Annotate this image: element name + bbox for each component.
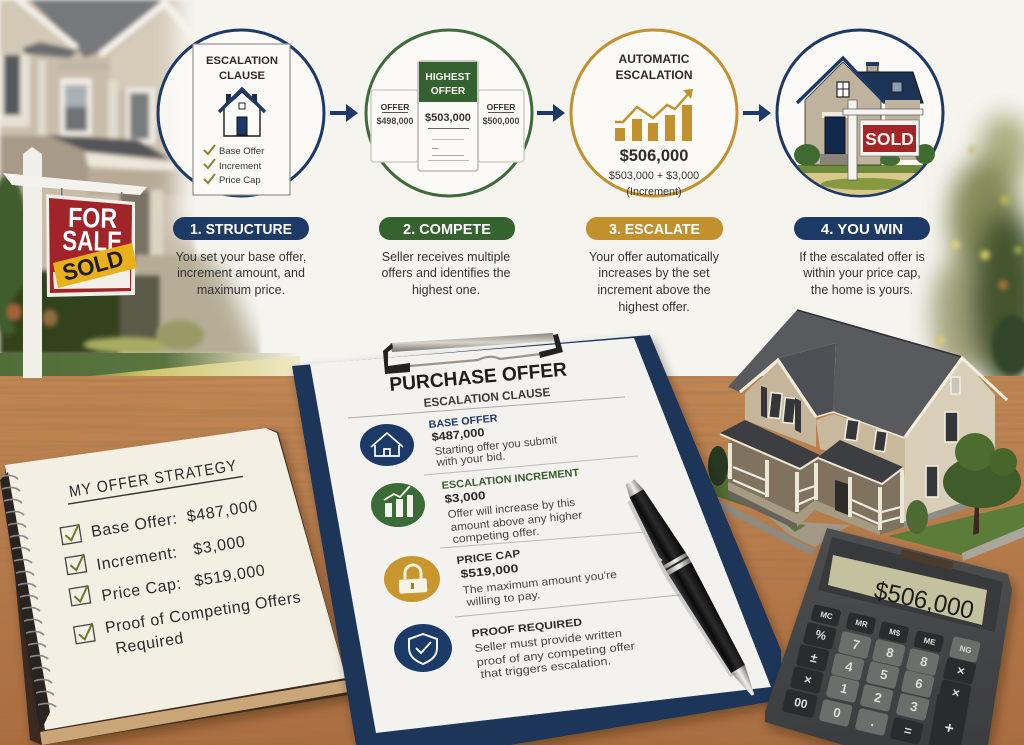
keypad: ± <box>809 650 819 666</box>
row: escalation increment: competing offer. <box>452 526 540 546</box>
heading: PURCHASE OFFER <box>389 359 568 396</box>
sold sign: SOLD <box>865 129 914 149</box>
step 1 label and description <box>173 217 309 297</box>
base and lawn <box>700 477 1024 561</box>
step 3 label and description: 3. ESCALATE <box>609 221 700 238</box>
step 3 label and description: increases by the set <box>598 266 710 280</box>
row: escalation increment: ESCALATION INCREMENT <box>441 467 580 492</box>
step 2 label and description: offers and identifies the <box>381 266 511 280</box>
keypad: MR <box>854 618 869 629</box>
icon: shield badge <box>394 624 452 672</box>
sold sign <box>843 100 923 180</box>
keypad: % <box>814 627 828 643</box>
clipboard clip <box>383 333 563 374</box>
row: proof required: PROOF REQUIRED <box>471 616 583 640</box>
for sale sign with sold rider: SALE <box>62 225 122 257</box>
keypad: 0 <box>832 704 842 721</box>
row: price cap <box>384 548 680 617</box>
step 3 circle: automatic escalation: $506,000 <box>620 147 688 165</box>
icon: house <box>219 89 265 136</box>
checklist: price cap: $519,000 <box>193 562 267 590</box>
keypad: 5 <box>879 666 889 683</box>
display: $506,000 <box>872 576 976 625</box>
row: price cap: PRICE CAP <box>456 548 521 567</box>
step 4 label and description: the home is yours. <box>811 283 913 297</box>
background photo: blurred suburban house on the left <box>0 0 420 377</box>
icon: padlock badge <box>384 556 440 602</box>
checklist: Price Cap <box>219 175 261 186</box>
offer card left: OFFER <box>381 102 409 112</box>
highest offer card: $503,000 <box>425 112 471 124</box>
upper front walls <box>745 362 816 447</box>
keypad: 6 <box>914 675 924 692</box>
heading: ESCALATION CLAUSE <box>423 385 551 410</box>
step 3 circle: automatic escalation: ESCALATION <box>615 68 693 82</box>
model house <box>700 310 1024 561</box>
row: escalation increment: $3,000 <box>444 490 486 506</box>
for sale sign with sold rider: FOR <box>68 202 117 234</box>
for sale sign with sold rider <box>3 147 147 378</box>
keypad: NG <box>959 644 972 655</box>
porch roofs <box>720 420 820 468</box>
pen <box>615 476 764 704</box>
notebook: my offer strategy <box>0 428 349 745</box>
step 2 label and description: Seller receives multiple <box>382 250 510 264</box>
main roof <box>728 310 962 437</box>
keypad: 4 <box>844 658 855 675</box>
step 1 circle: escalation clause document: ESCALATION <box>206 55 278 67</box>
icon: house illustration <box>794 58 935 166</box>
highest offer card: HIGHEST <box>425 72 471 83</box>
checklist: increment: Increment: <box>95 544 179 574</box>
row: price cap: $519,000 <box>460 563 519 581</box>
gable trim <box>905 358 1007 437</box>
step 4 label and description: within your price cap, <box>802 266 921 280</box>
keypad: 2 <box>873 689 883 706</box>
checklist: proof of competing offers <box>73 589 306 664</box>
keypad: M$ <box>888 627 902 638</box>
icon: house badge <box>360 424 414 466</box>
step 4 label and description <box>794 217 930 297</box>
checklist: base offer: Base Offer: <box>90 511 179 541</box>
checklist: Base Offer <box>219 146 264 157</box>
offer card left: $498,000 <box>377 116 413 126</box>
keypad: 8 <box>919 653 929 670</box>
wooden table <box>0 376 1024 745</box>
highest offer card <box>418 61 478 171</box>
row: base offer: $487,000 <box>431 427 485 444</box>
checklist: price cap <box>69 557 267 610</box>
step 3 label and description <box>586 217 723 314</box>
offer card left <box>371 90 418 162</box>
step 1 label and description: increment amount, and <box>177 266 305 280</box>
step 4 circle: sold house <box>777 30 943 196</box>
step 2 circle: competing offers <box>366 30 532 196</box>
step 4 label and description: 4. YOU WIN <box>821 221 903 238</box>
step 1 circle: escalation clause document <box>158 30 324 196</box>
offer card right <box>478 90 524 162</box>
background: pale sky wash <box>0 0 1024 380</box>
keypad: × <box>803 671 814 688</box>
row: proof required <box>394 616 636 681</box>
keypad: MC <box>819 610 834 621</box>
dormer roof <box>778 343 836 417</box>
step 2 label and description: 2. COMPETE <box>403 221 491 238</box>
heading <box>348 359 625 418</box>
keypad: + <box>943 719 955 738</box>
step 3 label and description: increment above the <box>597 283 711 297</box>
step 1 label and description: 1. STRUCTURE <box>190 221 292 238</box>
keypad: 00 <box>793 695 809 711</box>
keypad <box>782 604 981 745</box>
handwritten heading: MY OFFER STRATEGY <box>68 458 239 501</box>
step 3 circle: automatic escalation: $503,000 + $3,000 <box>609 170 699 182</box>
row: proof required: proof of any competing offer <box>476 640 636 669</box>
step 3 circle: automatic escalation: (Increment) <box>626 186 682 198</box>
checklist: increment: $3,000 <box>192 534 247 559</box>
keypad: 8 <box>885 644 895 661</box>
keypad: × <box>956 662 967 679</box>
keypad: = <box>903 722 914 739</box>
step 2 label and description <box>379 217 515 297</box>
keypad: . <box>870 714 876 729</box>
row: proof required: Seller must provide written <box>474 628 623 655</box>
calculator <box>765 528 1012 745</box>
row: base offer <box>360 412 638 475</box>
keypad: × <box>951 684 962 701</box>
step 1 label and description: You set your base offer, <box>176 250 306 264</box>
keypad: 3 <box>909 698 919 715</box>
row: price cap: The maximum amount you're <box>462 569 617 597</box>
for sale sign with sold rider: SOLD <box>60 245 126 286</box>
checklist: proof of competing offers: Proof of Competing Offers <box>104 589 302 637</box>
row: price cap: willing to pay. <box>465 589 541 609</box>
clipboard with purchase offer <box>292 333 781 745</box>
checklist: proof of competing offers: Required <box>114 630 185 658</box>
checklist: Increment <box>219 161 262 172</box>
chart: rising bars <box>615 89 693 141</box>
row: escalation increment: Offer will increase by this <box>447 497 576 521</box>
background photo: blurred trees on the right <box>932 114 1024 390</box>
step 1 label and description: maximum price. <box>197 283 285 297</box>
row: base offer: BASE OFFER <box>428 412 498 431</box>
arrow 2 <box>537 104 565 122</box>
right wall <box>903 358 995 527</box>
row: base offer: with your bid. <box>435 450 506 469</box>
keypad: 7 <box>851 636 861 653</box>
windows <box>769 377 960 497</box>
step 1 circle: escalation clause document: CLAUSE <box>219 70 266 82</box>
highest offer card: OFFER <box>431 86 466 97</box>
keypad: 1 <box>839 680 849 697</box>
step 3 circle: automatic escalation <box>571 30 737 198</box>
lower front wall and porch <box>728 440 904 535</box>
icon: chart badge <box>371 483 425 527</box>
porch posts and railings <box>730 443 902 530</box>
shrubs <box>708 446 728 486</box>
checklist: base offer: $487,000 <box>186 498 259 526</box>
step 2 label and description: highest one. <box>412 283 480 297</box>
tree <box>943 433 1021 535</box>
step 3 circle: automatic escalation: AUTOMATIC <box>619 52 690 66</box>
soft white fade over the house <box>176 0 420 360</box>
row: proof required: that triggers escalation. <box>480 655 612 681</box>
step 4 label and description: If the escalated offer is <box>799 250 925 264</box>
keypad: ME <box>923 636 937 647</box>
checklist: price cap: Price Cap: <box>100 575 183 605</box>
step 3 label and description: Your offer automatically <box>589 250 720 264</box>
checklist: base offer <box>60 496 259 546</box>
offer card right: OFFER <box>487 102 515 112</box>
row: escalation increment: amount above any higher <box>450 509 583 534</box>
arrow 1 <box>330 104 358 122</box>
row: escalation increment <box>371 467 645 548</box>
step 3 label and description: highest offer. <box>618 300 690 314</box>
arrow 3 <box>743 104 771 122</box>
spiral binding <box>0 475 56 707</box>
checklist <box>204 145 264 186</box>
checklist: increment <box>65 529 247 579</box>
row: base offer: Starting offer you submit <box>434 434 558 458</box>
display <box>828 555 987 625</box>
offer card right: $500,000 <box>483 116 519 126</box>
